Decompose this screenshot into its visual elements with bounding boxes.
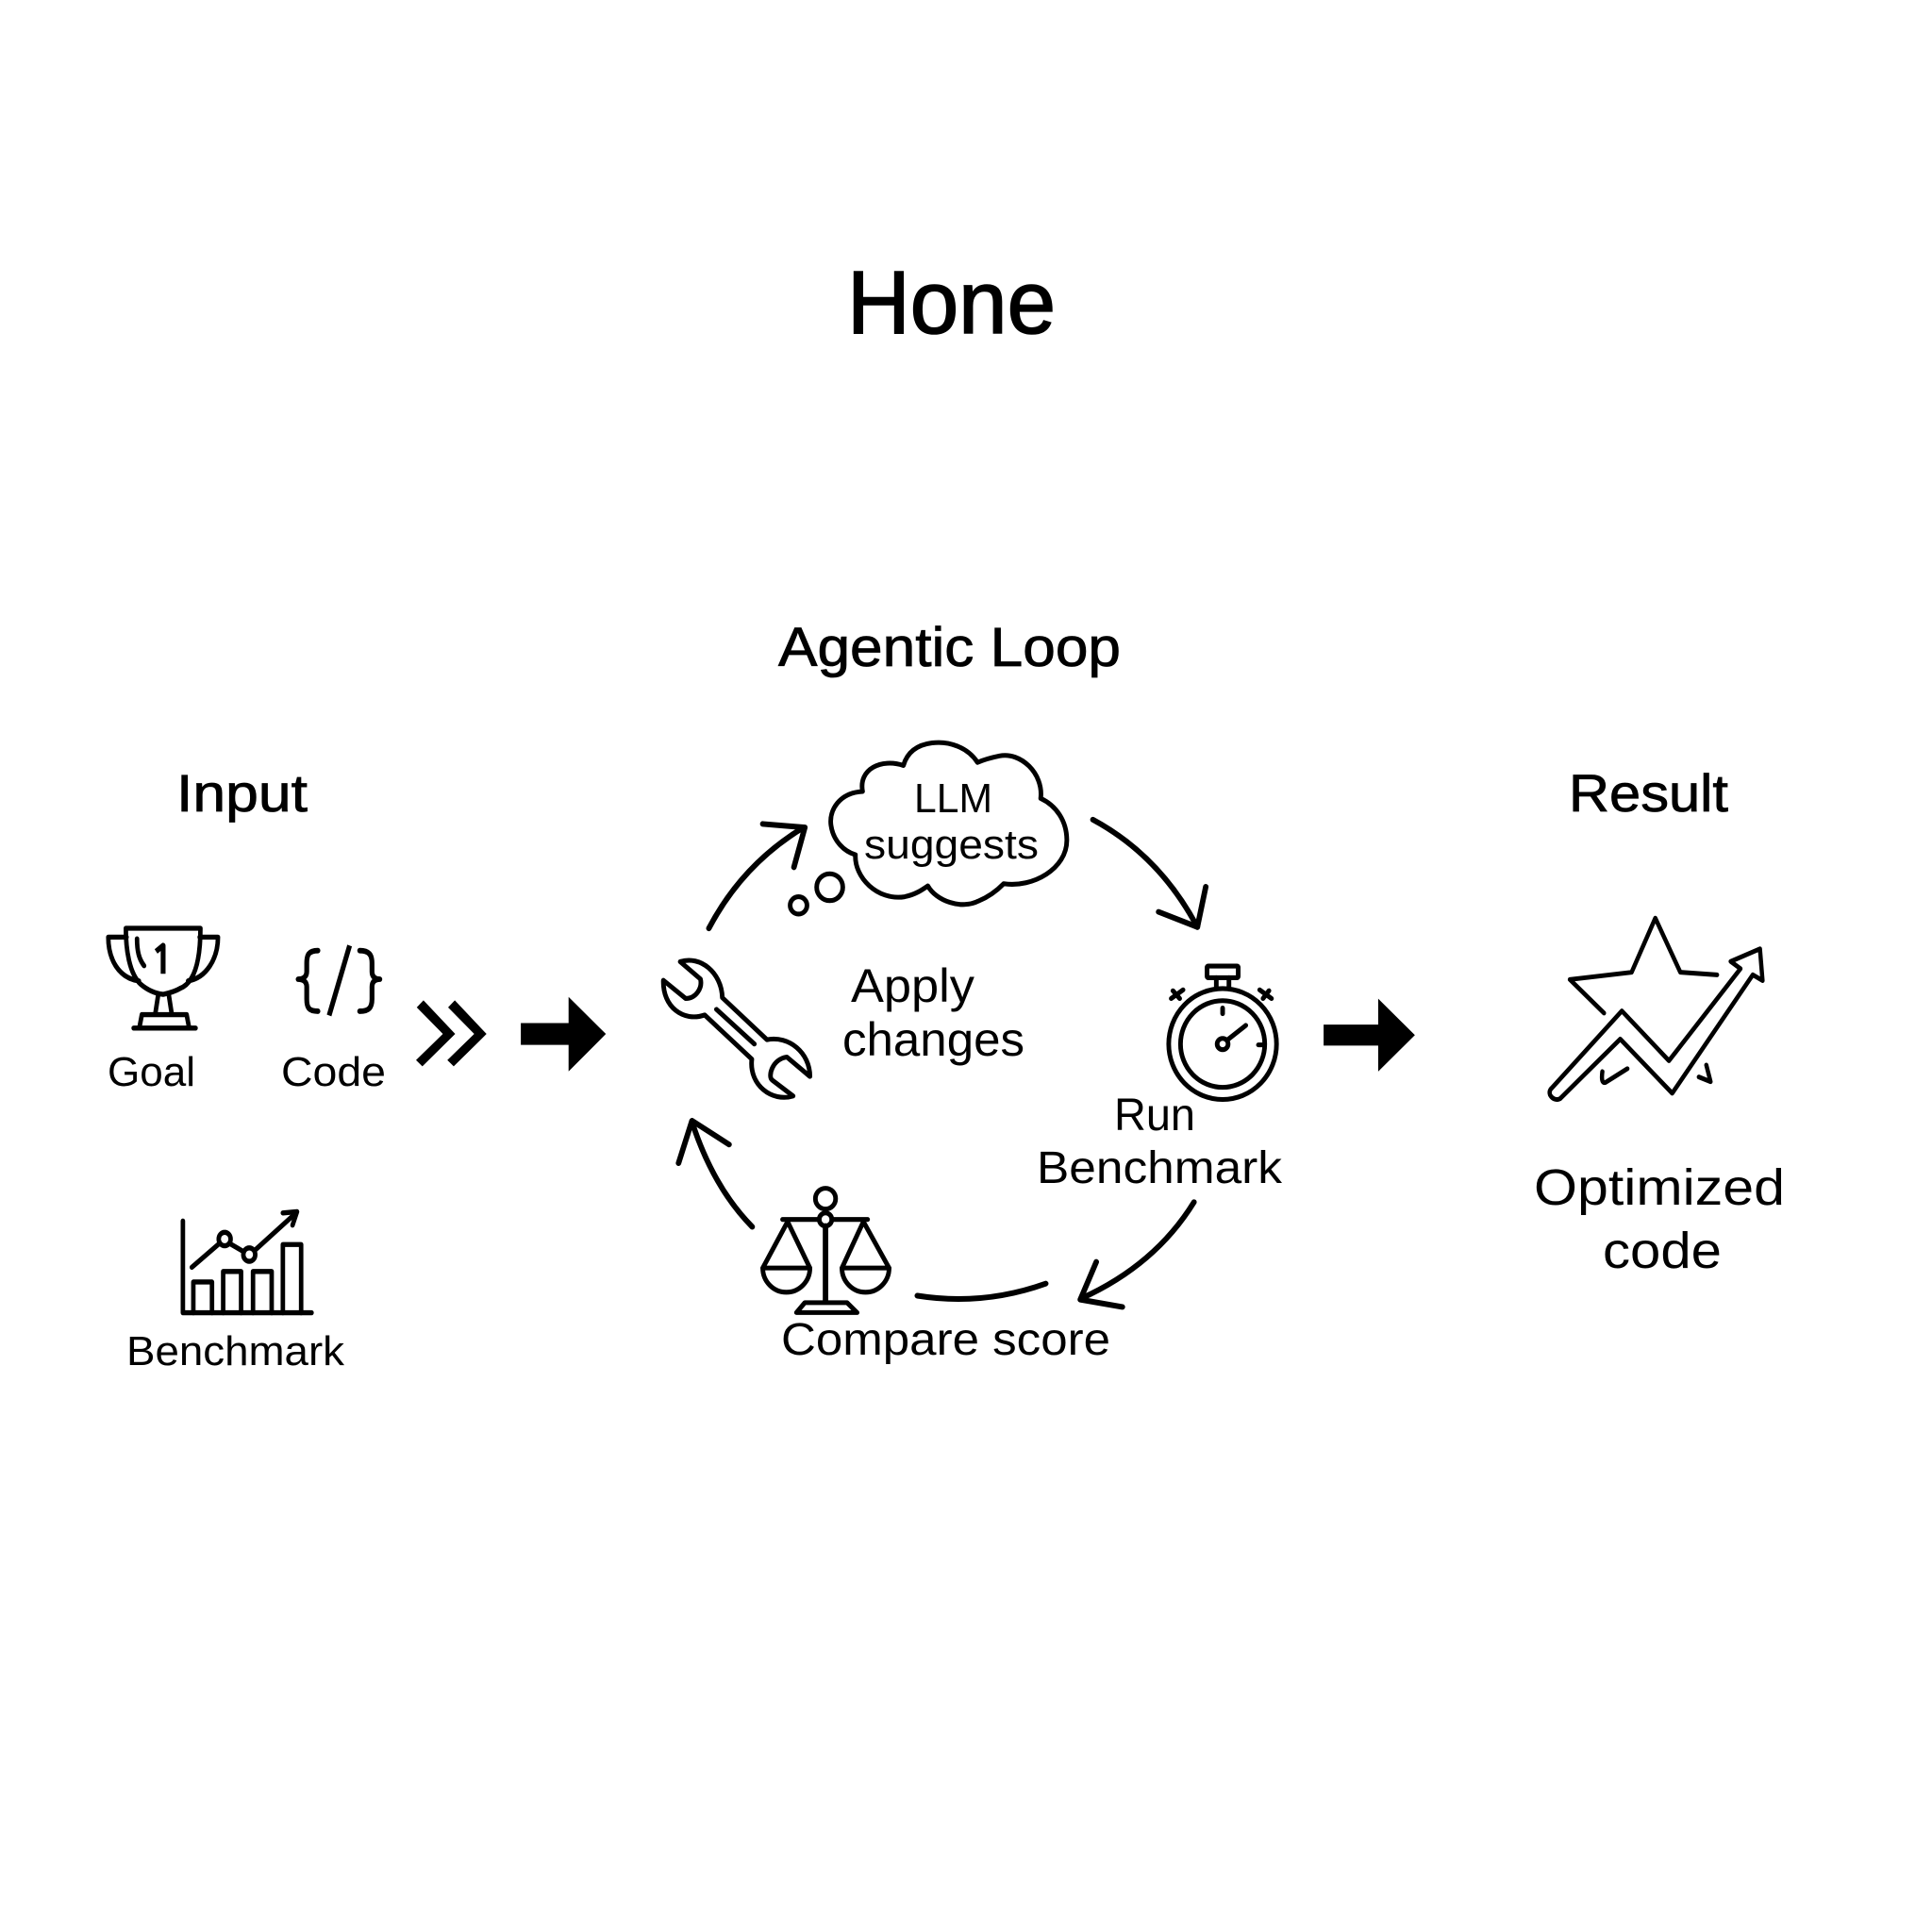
arrow: loop to result [1324,999,1415,1072]
arrow: run to compare [1080,1202,1194,1307]
label: benchmark: Benchmark [126,1328,345,1374]
label: llm suggests: LLM [914,775,992,822]
panel: result [1534,763,1799,1279]
label: run benchmark: Benchmark [1037,1143,1283,1193]
arrow: compare to apply [678,1121,752,1226]
label: goal: Goal [108,1049,195,1095]
heading: result: Result [1569,763,1728,823]
label: code: Code [281,1049,386,1095]
icon: stopwatch [1169,966,1276,1099]
label: apply changes: changes [842,1013,1024,1066]
title: Hone [847,253,1056,353]
heading: agentic loop: Agentic Loop [778,617,1121,678]
label: apply changes: Apply [851,959,974,1012]
icon: balance scale [763,1189,889,1312]
panel: agentic loop [663,617,1283,1365]
heading: input: Input [176,763,308,823]
panel: input [108,763,487,1374]
arc: compare connector [917,1284,1046,1299]
label: optimized code: Optimized [1534,1159,1785,1216]
icon: wrench [663,960,810,1097]
icon: code braces [298,945,380,1015]
icon: double chevron [416,1000,487,1066]
arrow: input to loop [521,997,606,1072]
label: llm suggests: suggests [864,822,1039,868]
icon: star with rising arrow [1550,918,1762,1099]
icon: benchmark chart [183,1211,311,1313]
icon: thought cloud [791,742,1067,914]
label: optimized code: code [1603,1223,1722,1279]
arrow: apply to llm [708,824,805,928]
label: run benchmark: Run [1114,1091,1195,1141]
label: compare score: Compare score [781,1315,1110,1365]
icon: trophy [108,928,218,1028]
arrow: llm to run [1093,820,1206,927]
